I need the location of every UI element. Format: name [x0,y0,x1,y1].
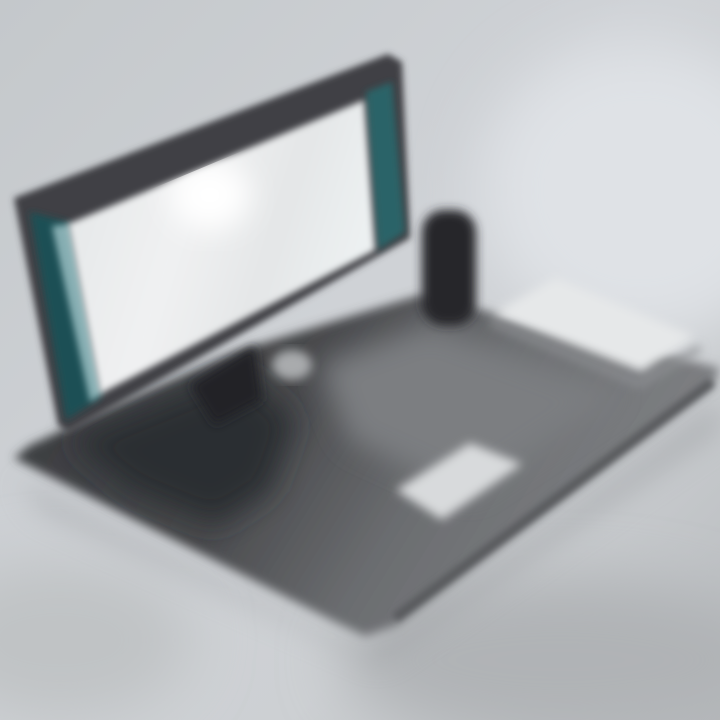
white tablet pad [490,278,700,384]
teal left bezel [30,212,100,420]
touchpad [396,443,522,520]
shadow under laptop base [20,400,720,662]
pale screen edge [52,224,102,402]
monitor frame [14,54,410,432]
screen glow [170,160,250,230]
keyboard area [320,325,620,495]
monitor stand [190,345,312,425]
dark shaded area beneath the monitor [70,370,295,525]
teal right bezel [366,82,405,250]
laptop base [14,295,720,636]
screen [68,100,375,394]
monitor [14,54,410,432]
base front edge highlight [395,382,712,618]
speaker cylinder [422,210,476,325]
